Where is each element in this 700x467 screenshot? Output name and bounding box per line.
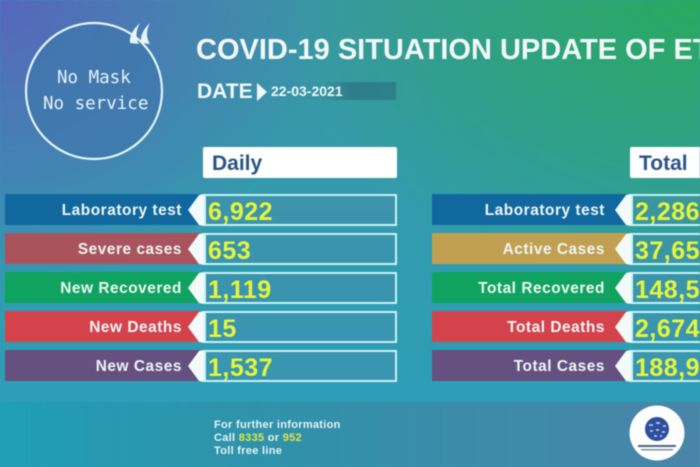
row: new deaths: New Deaths [89,319,182,336]
row: new cases: New Cases [96,358,182,375]
heading: Daily: Daily [212,152,262,175]
panel: total figures [431,193,700,383]
heading: Total: Total [639,152,688,175]
row: new recovered [4,271,398,305]
row: active cases: Active Cases [503,241,605,258]
row: new recovered: New Recovered [60,280,182,297]
row: new deaths: 15 [208,315,237,343]
row: severe cases [4,232,398,266]
icon: quotation marks [129,23,150,45]
date value: 22-03-2021 [271,83,343,99]
logo [628,404,686,462]
row: active cases [431,232,700,266]
row: new cases [4,349,398,383]
row: new cases: 1,537 [208,354,273,382]
badge text line 2: No service [43,94,148,114]
date label: DATE [197,80,253,103]
heading: Total [630,147,700,178]
row: total cases [432,349,700,383]
footer contact text [213,419,341,457]
row: laboratory test total: Laboratory test [485,202,605,219]
heading: Daily [203,147,397,178]
panel: daily figures [4,193,398,383]
row: laboratory test: 6,922 [208,198,273,226]
badge: No Mask No service [24,21,164,161]
row: severe cases: Severe cases [78,241,182,258]
row: severe cases: 653 [208,237,251,265]
row: total deaths: 2,674 [635,315,700,343]
row: laboratory test total [432,193,700,227]
row: total recovered: Total Recovered [478,280,605,297]
footer contact text: For further information [214,419,341,431]
row: total recovered [432,271,700,305]
row: total deaths: Total Deaths [507,319,605,336]
row: total deaths [431,310,700,344]
footer band [0,402,700,467]
footer contact text: Toll free line [214,445,282,457]
icon: date arrow [256,82,268,102]
badge circle [24,21,164,161]
row: laboratory test: Laboratory test [62,202,182,219]
row: new recovered: 1,119 [208,276,272,304]
row: total cases: Total Cases [514,358,605,375]
date strip [268,82,396,100]
row: laboratory test [4,193,398,227]
badge text line 1: No Mask [57,68,131,88]
footer contact text: Call 8335 or 952 [214,432,302,444]
row: new deaths [4,310,398,344]
